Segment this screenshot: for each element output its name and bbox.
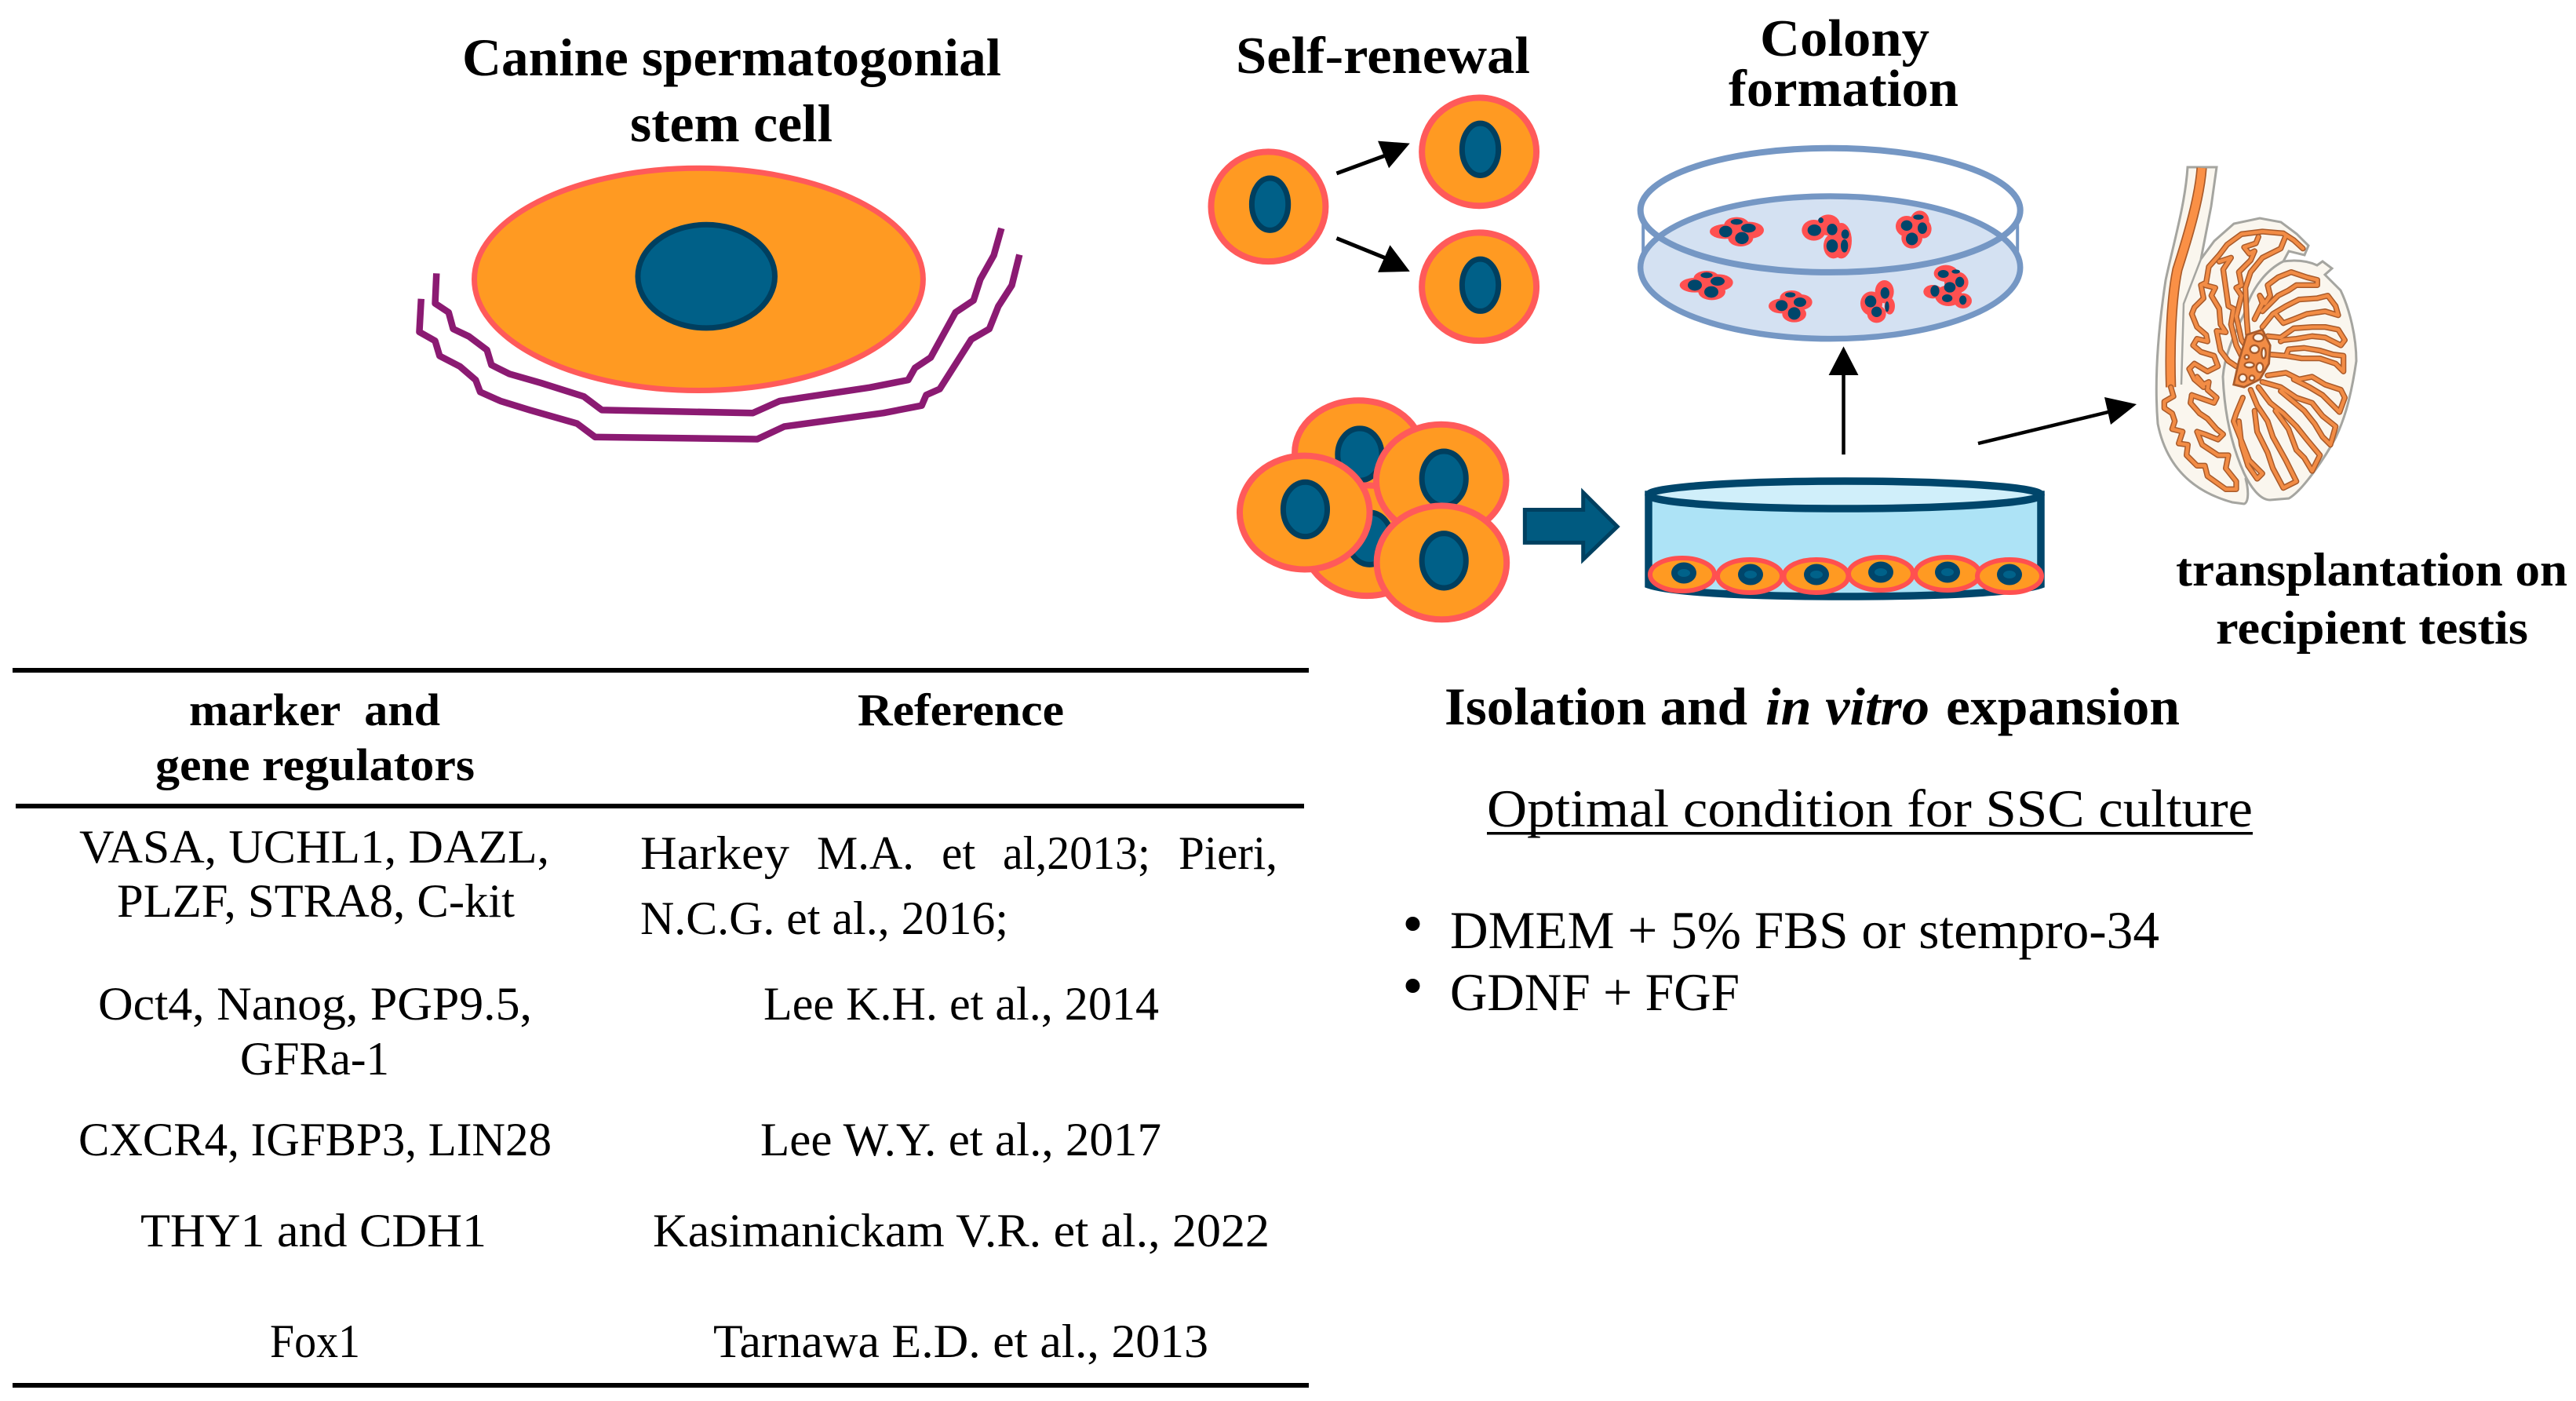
row 1 reference: al,2013; <box>1003 827 1150 879</box>
heading: isolation and in vitro expansion <box>1445 677 2180 736</box>
table header <box>155 684 1064 790</box>
row 5: Tarnawa E.D. et al., 2013 <box>713 1315 1208 1367</box>
illustration: self-renewal cell division <box>1211 97 1536 341</box>
cell 6 <box>1977 560 2042 593</box>
illustration: culture dish with cell monolayer <box>1649 481 2042 597</box>
daughter cell top <box>1422 97 1536 206</box>
basement membrane inner line <box>435 228 1001 413</box>
illustration: large stem cell on basement membrane <box>419 168 1019 440</box>
bullet list: culture conditions <box>1406 900 2159 1022</box>
cell 3 <box>1784 560 1849 593</box>
arrow: culture dish to testis <box>1978 397 2137 443</box>
title: canine spermatogonial stem cell <box>462 27 1001 153</box>
illustration: cluster of isolated cells <box>1240 400 1507 619</box>
heading: transplantation on recipient testis <box>2176 544 2567 654</box>
cell 2 <box>1718 560 1782 593</box>
table header: Reference <box>858 684 1064 735</box>
row 2: Lee K.H. et al., 2014 <box>763 978 1159 1030</box>
row 4: THY1 and CDH1 <box>140 1205 486 1257</box>
arrow to top daughter <box>1336 141 1410 173</box>
bullet list: culture conditions: DMEM + 5% FBS or stempro-34 <box>1450 900 2159 960</box>
illustration: petri dish with colonies <box>1641 148 2020 339</box>
row 1 reference <box>640 827 1277 944</box>
bullet list: culture conditions: GDNF + FGF <box>1450 962 1740 1022</box>
heading: self-renewal: Self-renewal <box>1236 27 1530 85</box>
testis outline <box>2223 261 2356 500</box>
row 1 markers <box>79 821 549 927</box>
cord and epididymis outline <box>2156 167 2308 504</box>
row 1 reference: M.A. <box>817 827 914 879</box>
row 1 markers: PLZF, STRA8, C-kit <box>117 875 515 927</box>
rete testis network <box>2234 330 2270 387</box>
subheading: optimal condition for SSC culture: Optimal condition for SSC culture <box>1487 779 2253 838</box>
row 2: Oct4, Nanog, PGP9.5, <box>98 978 532 1030</box>
heading: transplantation on recipient testis: recipient testis <box>2216 602 2528 654</box>
title: canine spermatogonial stem cell: Canine spermatogonial <box>462 27 1001 87</box>
arrow: culture dish to colony formation <box>1829 346 1858 454</box>
cell 1 <box>1650 558 1714 591</box>
spermatic cord tube <box>2170 168 2202 387</box>
heading: colony formation <box>1729 9 1958 118</box>
row 1 reference: et <box>942 827 975 879</box>
arrow to bottom daughter <box>1336 239 1410 272</box>
heading: colony formation: formation <box>1729 60 1958 118</box>
basement membrane outer line <box>419 255 1019 440</box>
row 1 reference: N.C.G. et al., 2016; <box>640 892 1008 944</box>
row 1 reference: Harkey <box>640 827 789 879</box>
daughter cell bottom <box>1422 232 1536 341</box>
heading: isolation and in vitro expansion: Isolation and <box>1445 677 1747 736</box>
table: markers and references <box>13 668 1309 1388</box>
title: canine spermatogonial stem cell: stem cell <box>630 93 833 153</box>
row 3 <box>78 1114 1161 1166</box>
seminiferous tubules <box>2164 232 2345 489</box>
cell 4 <box>1849 557 1913 590</box>
row 2 <box>98 978 1159 1085</box>
row 5 <box>270 1315 1208 1367</box>
inner gray membrane line <box>2181 259 2201 385</box>
row 4 <box>140 1205 1270 1257</box>
row 1 reference: Pieri, <box>1179 827 1277 879</box>
colonies <box>1680 210 1972 323</box>
heading: isolation and in vitro expansion: expansion <box>1946 677 2180 736</box>
row 5: Fox1 <box>270 1315 360 1367</box>
row 3: Lee W.Y. et al., 2017 <box>760 1114 1161 1166</box>
row 1 markers: VASA, UCHL1, DAZL, <box>79 821 549 873</box>
heading: transplantation on recipient testis: transplantation on <box>2176 544 2567 596</box>
cell 5 <box>1915 557 1980 590</box>
table header: marker and <box>189 684 440 735</box>
row 3: CXCR4, IGFBP3, LIN28 <box>78 1114 552 1166</box>
heading: colony formation: Colony <box>1760 9 1929 67</box>
row 2: GFRa-1 <box>240 1033 389 1085</box>
parent cell <box>1211 151 1325 261</box>
illustration: recipient testis <box>2156 167 2356 504</box>
nucleus <box>638 224 774 328</box>
cell body <box>475 168 923 391</box>
heading: isolation and in vitro expansion: in vitro <box>1765 677 1929 736</box>
row 4: Kasimanickam V.R. et al., 2022 <box>653 1205 1270 1257</box>
table header: gene regulators <box>155 739 475 790</box>
arrow: cluster to culture dish <box>1525 493 1617 560</box>
